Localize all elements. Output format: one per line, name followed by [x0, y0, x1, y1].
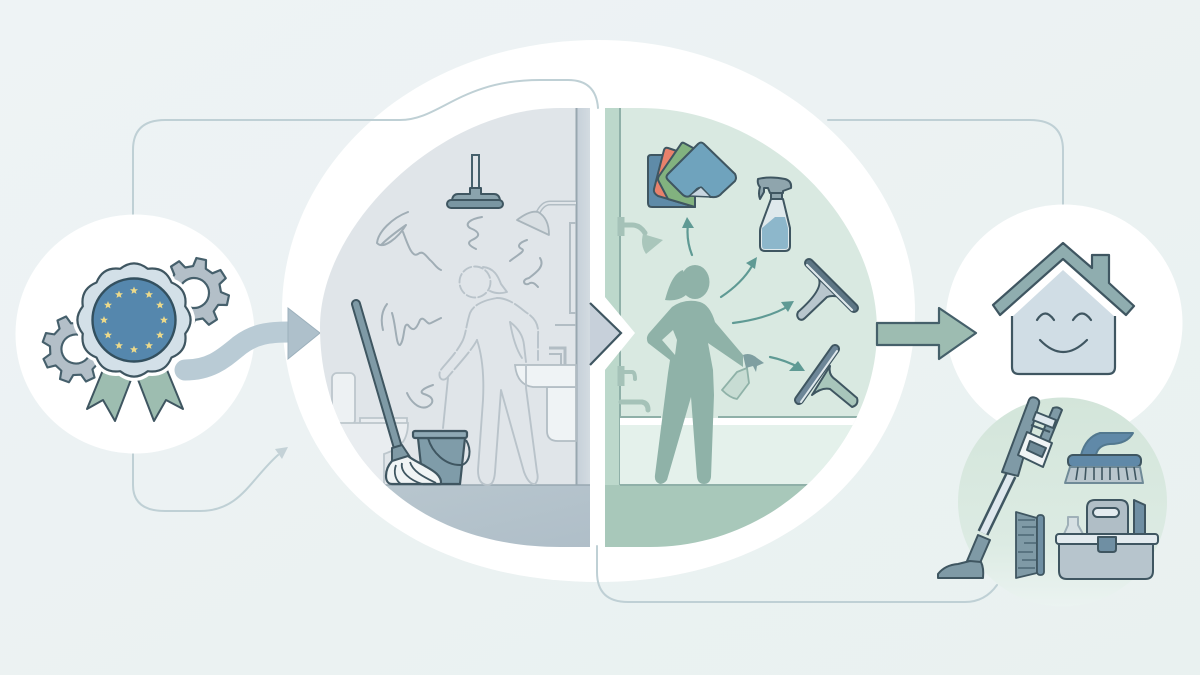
large white circle behind split scene	[282, 40, 915, 582]
icon: gears and EU badge	[33, 252, 235, 421]
white circle: happy home	[946, 204, 1182, 442]
floor	[605, 485, 806, 547]
sink	[515, 365, 576, 441]
icon: cordless vacuum	[938, 397, 1062, 578]
panel: before scene	[318, 100, 590, 550]
EU stars	[100, 286, 168, 353]
icon: faded spray bottle in hand	[722, 354, 764, 399]
house body	[1012, 270, 1115, 374]
icon: squeegee one	[797, 263, 854, 320]
icon: right gear	[153, 252, 235, 334]
green circle: tools	[958, 398, 1167, 606]
icon: hand brush	[1016, 512, 1044, 578]
white circle: certification	[16, 214, 254, 454]
bathtub	[620, 425, 852, 484]
floor	[386, 485, 590, 547]
side wall strip	[605, 100, 620, 490]
side wall strip	[577, 100, 590, 490]
divider: grey chevron	[590, 303, 621, 365]
icon: left gear	[33, 306, 119, 392]
icon: bucket	[413, 431, 469, 484]
icon: spray bottle	[758, 178, 791, 251]
icon: squeegee two	[799, 349, 857, 407]
connector lines	[133, 80, 1063, 602]
toilet	[331, 372, 409, 484]
panel: after scene	[605, 100, 880, 550]
shower head	[642, 234, 663, 254]
shower head	[517, 212, 549, 235]
EU blue disc	[92, 278, 176, 362]
icon: mop	[356, 304, 441, 484]
arrows: from person to tools	[688, 224, 800, 368]
arrow body	[185, 332, 290, 370]
wall	[605, 100, 880, 490]
figure: person silhouette	[647, 265, 743, 484]
wall	[318, 100, 590, 490]
rosette halo	[77, 263, 191, 377]
icon: floor nozzle	[447, 155, 503, 208]
ribbon left	[87, 370, 132, 421]
arrow: wavy flow from badge to scene	[185, 308, 320, 370]
arrow head: thin connector	[275, 447, 288, 459]
smile face	[1037, 314, 1091, 352]
roof and chimney	[993, 243, 1134, 315]
squiggles: grime	[377, 212, 542, 408]
faded shower and taps	[621, 217, 648, 410]
icon: microfibre cloths	[648, 142, 736, 207]
rosette	[77, 263, 191, 377]
arrow head	[288, 308, 320, 359]
icon: cleaning caddy	[1056, 500, 1158, 579]
icon: scrub brush	[1065, 433, 1143, 483]
wall fixtures	[537, 203, 576, 365]
arrow heads	[682, 217, 805, 371]
arrow: scene to home	[877, 308, 976, 359]
ribbon right	[137, 370, 183, 421]
figure: faded dashed person	[439, 266, 538, 485]
icon: smiling house	[993, 243, 1134, 374]
